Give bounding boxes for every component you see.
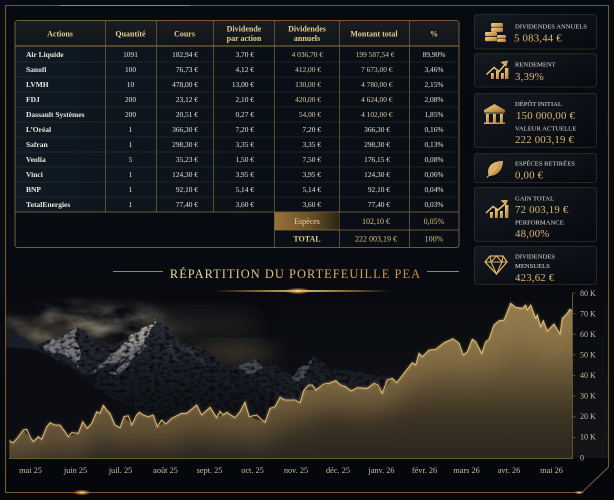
table rows: 200	[125, 110, 136, 119]
table rows: 2,08%	[424, 95, 444, 104]
table header: Montant total	[350, 30, 398, 38]
y axis labels	[580, 289, 596, 462]
cash row	[274, 212, 445, 230]
x axis labels: mars 26	[453, 466, 480, 475]
main peaks	[37, 327, 108, 378]
table rows: 0,03%	[424, 200, 444, 209]
table rows: L’Oréal	[26, 125, 51, 134]
table rows: 1091	[123, 50, 138, 59]
table rows: Sanofi	[26, 65, 46, 74]
table rows: 13,00 €	[232, 80, 254, 89]
table rows: Safran	[26, 140, 48, 149]
table rows: 4,12 €	[236, 65, 254, 74]
table rows: 298,30 €	[364, 140, 390, 149]
card: dividendes annuels: DIVIDENDES ANNUELS	[515, 24, 587, 30]
table rows: 4 624,00 €	[361, 95, 393, 104]
distant right peaks	[36, 318, 388, 419]
table rows: 100	[125, 65, 136, 74]
total row: 100%	[425, 234, 444, 244]
y axis labels: 50 K	[580, 350, 596, 360]
table rows: 3,95 €	[303, 170, 321, 179]
y axis labels: 20 K	[580, 412, 596, 421]
table header: Cours	[174, 30, 195, 38]
table rows: 182,94 €	[172, 50, 198, 59]
x axis labels	[19, 466, 563, 475]
table rows	[26, 50, 445, 209]
table rows: 5	[129, 155, 133, 164]
table rows: Vinci	[26, 170, 43, 179]
x axis labels: avr. 26	[498, 466, 520, 475]
cash row: Espèces	[294, 217, 320, 226]
table rows: 35,23 €	[176, 155, 198, 164]
table rows: 3,95 €	[236, 170, 254, 179]
table rows: 5,14 €	[303, 185, 321, 194]
x axis labels: juin 25	[63, 466, 87, 475]
table rows: 76,73 €	[176, 65, 198, 74]
card: rendement: 3,39%	[515, 71, 544, 83]
table rows: 176,15 €	[364, 155, 390, 164]
heading	[113, 267, 459, 294]
card: gain total et performance: 48,00%	[515, 228, 550, 240]
table rows: 92,10 €	[368, 185, 390, 194]
card: dépôt initial et valeur actuelle: VALEUR ACTUELLE	[515, 126, 576, 132]
x axis labels: nov. 25	[284, 466, 308, 475]
card: gain total et performance: 72 003,19 €	[515, 204, 569, 216]
y axis labels: 40 K	[580, 371, 596, 380]
table rows: BNP	[26, 185, 41, 194]
table rows: 1,50 €	[236, 155, 254, 164]
x axis labels: déc. 25	[326, 466, 350, 475]
y axis labels: 80 K	[580, 289, 596, 298]
table rows: 89,90%	[423, 50, 445, 59]
x axis labels: sept. 25	[197, 466, 222, 475]
table rows: 0,27 €	[236, 110, 254, 119]
icon: diamond	[485, 256, 507, 274]
card: dépôt initial et valeur actuelle	[474, 94, 596, 148]
cash row: 102,10 €	[362, 217, 390, 226]
table rows: 77,40 €	[176, 200, 198, 209]
table rows: 199 587,54 €	[356, 50, 395, 59]
table rows: 10	[127, 80, 134, 89]
table rows: 298,30 €	[172, 140, 198, 149]
y axis labels: 70 K	[580, 310, 596, 318]
table rows: TotalEnergies	[26, 200, 70, 209]
icon: bank	[484, 104, 505, 124]
table rows: 130,00 €	[295, 80, 321, 89]
x axis labels: mai 25	[19, 466, 42, 475]
mountain landscape backdrop	[6, 298, 608, 458]
table rows: 0,16%	[424, 125, 444, 134]
table header: par action	[227, 34, 262, 43]
card: rendement: RENDEMENT	[515, 62, 556, 68]
table rows: 1	[129, 140, 133, 149]
table rows: 366,30 €	[364, 125, 390, 134]
table rows: Veolia	[26, 155, 46, 164]
table rows: 20,51 €	[176, 110, 198, 119]
chart axes	[9, 289, 596, 475]
table header: Quantité	[115, 30, 146, 38]
table rows: 3,60 €	[303, 200, 321, 209]
table rows: 3,35 €	[236, 140, 254, 149]
table rows: 1	[129, 170, 133, 179]
table rows: Air Liquide	[26, 50, 64, 59]
table rows: 4 780,00 €	[361, 80, 393, 89]
table rows: 0,04%	[424, 185, 444, 194]
table rows: 2,15%	[424, 80, 444, 89]
table rows: 1	[129, 200, 133, 209]
x axis labels: mai 26	[540, 466, 563, 475]
table rows: 0,13%	[424, 140, 444, 149]
table header: %	[430, 30, 438, 38]
table rows: 4 102,00 €	[361, 110, 393, 119]
table rows: 478,00 €	[172, 80, 198, 89]
icon: leaf	[487, 161, 503, 178]
y axis labels: 0	[580, 454, 584, 462]
icon: growth chart	[486, 200, 508, 218]
icon: growth chart	[486, 60, 508, 79]
card: gain total et performance: PERFORMANCE	[515, 220, 564, 226]
table rows: 420,00 €	[295, 95, 321, 104]
card: rendement	[474, 54, 596, 87]
table rows: 1,85%	[424, 110, 444, 119]
table rows: 23,12 €	[176, 95, 198, 104]
x axis labels: août 25	[153, 466, 178, 475]
table header: Dividende	[227, 24, 262, 34]
y axis labels: 30 K	[580, 392, 596, 400]
table rows: 3,60 €	[236, 200, 254, 209]
table rows: 200	[125, 95, 136, 104]
card: dépôt initial et valeur actuelle: 222 003,19 €	[515, 134, 574, 146]
card: dividendes annuels	[474, 14, 596, 49]
card: dividendes mensuels: MENSUELS	[515, 263, 550, 270]
x axis labels: juil. 25	[108, 466, 132, 475]
table rows: LVMH	[26, 80, 49, 89]
table header: Dividendes	[288, 24, 326, 34]
table rows: 2,10 €	[236, 95, 254, 104]
table rows: 77,40 €	[368, 200, 390, 209]
card: dividendes mensuels: DIVIDENDES	[515, 254, 555, 260]
table rows: 7 673,00 €	[361, 65, 393, 74]
table rows: 5,14 €	[236, 185, 254, 194]
table rows: 7,20 €	[303, 125, 321, 134]
card: dividendes mensuels: 423,62 €	[515, 272, 555, 284]
table header: Actions	[47, 30, 73, 38]
card: espèces retirées: ESPÈCES RETIRÉES	[515, 160, 575, 168]
area chart	[8, 301, 574, 458]
table rows: FDJ	[26, 95, 40, 104]
card: espèces retirées	[474, 154, 596, 182]
table rows: 124,30 €	[172, 170, 198, 179]
table header: annuels	[294, 34, 320, 43]
table rows: 54,00 €	[299, 110, 321, 119]
heading: RÉPARTITION DU PORTEFEUILLE PEA	[170, 267, 421, 281]
foreground dark ridge	[6, 336, 138, 458]
table rows: 92,10 €	[176, 185, 198, 194]
table rows: 3,70 €	[236, 50, 254, 59]
table header	[16, 21, 458, 46]
table rows: 1	[129, 125, 133, 134]
table rows: 0,08%	[424, 155, 444, 164]
table rows: 1	[129, 185, 133, 194]
card: dépôt initial et valeur actuelle: 150 000,00 €	[516, 110, 575, 122]
card: gain total et performance: GAIN TOTAL	[515, 196, 554, 202]
table rows: 366,30 €	[172, 125, 198, 134]
total row: TOTAL	[293, 234, 321, 244]
icon: coins	[485, 23, 506, 42]
x axis labels: oct. 25	[241, 466, 264, 475]
card: espèces retirées: 0,00 €	[515, 170, 544, 182]
card: gain total et performance	[474, 188, 596, 242]
table rows: 4 036,70 €	[292, 50, 323, 59]
table rows: 0,06%	[424, 170, 444, 179]
card: dividendes mensuels	[474, 246, 596, 284]
y axis labels: 10 K	[580, 432, 596, 442]
table rows: 3,35 €	[303, 140, 321, 149]
cash row: 0,05%	[424, 217, 445, 226]
y axis labels: 60 K	[580, 330, 596, 339]
table rows: 412,00 €	[295, 65, 321, 74]
table rows: 124,30 €	[364, 170, 390, 179]
x axis labels: janv. 26	[367, 466, 395, 475]
card: dépôt initial et valeur actuelle: DÉPÔT INITIAL	[515, 100, 562, 108]
x axis labels: févr. 26	[412, 466, 437, 475]
table rows: Dassault Systèmes	[26, 110, 85, 119]
table rows: 7,20 €	[236, 125, 254, 134]
holdings table	[15, 20, 459, 248]
total row: 222 003,19 €	[355, 234, 397, 244]
card: dividendes annuels: 5 083,44 €	[514, 32, 562, 44]
total row	[293, 234, 444, 244]
table rows: 7,50 €	[303, 155, 321, 164]
table rows: 3,46%	[424, 65, 444, 74]
